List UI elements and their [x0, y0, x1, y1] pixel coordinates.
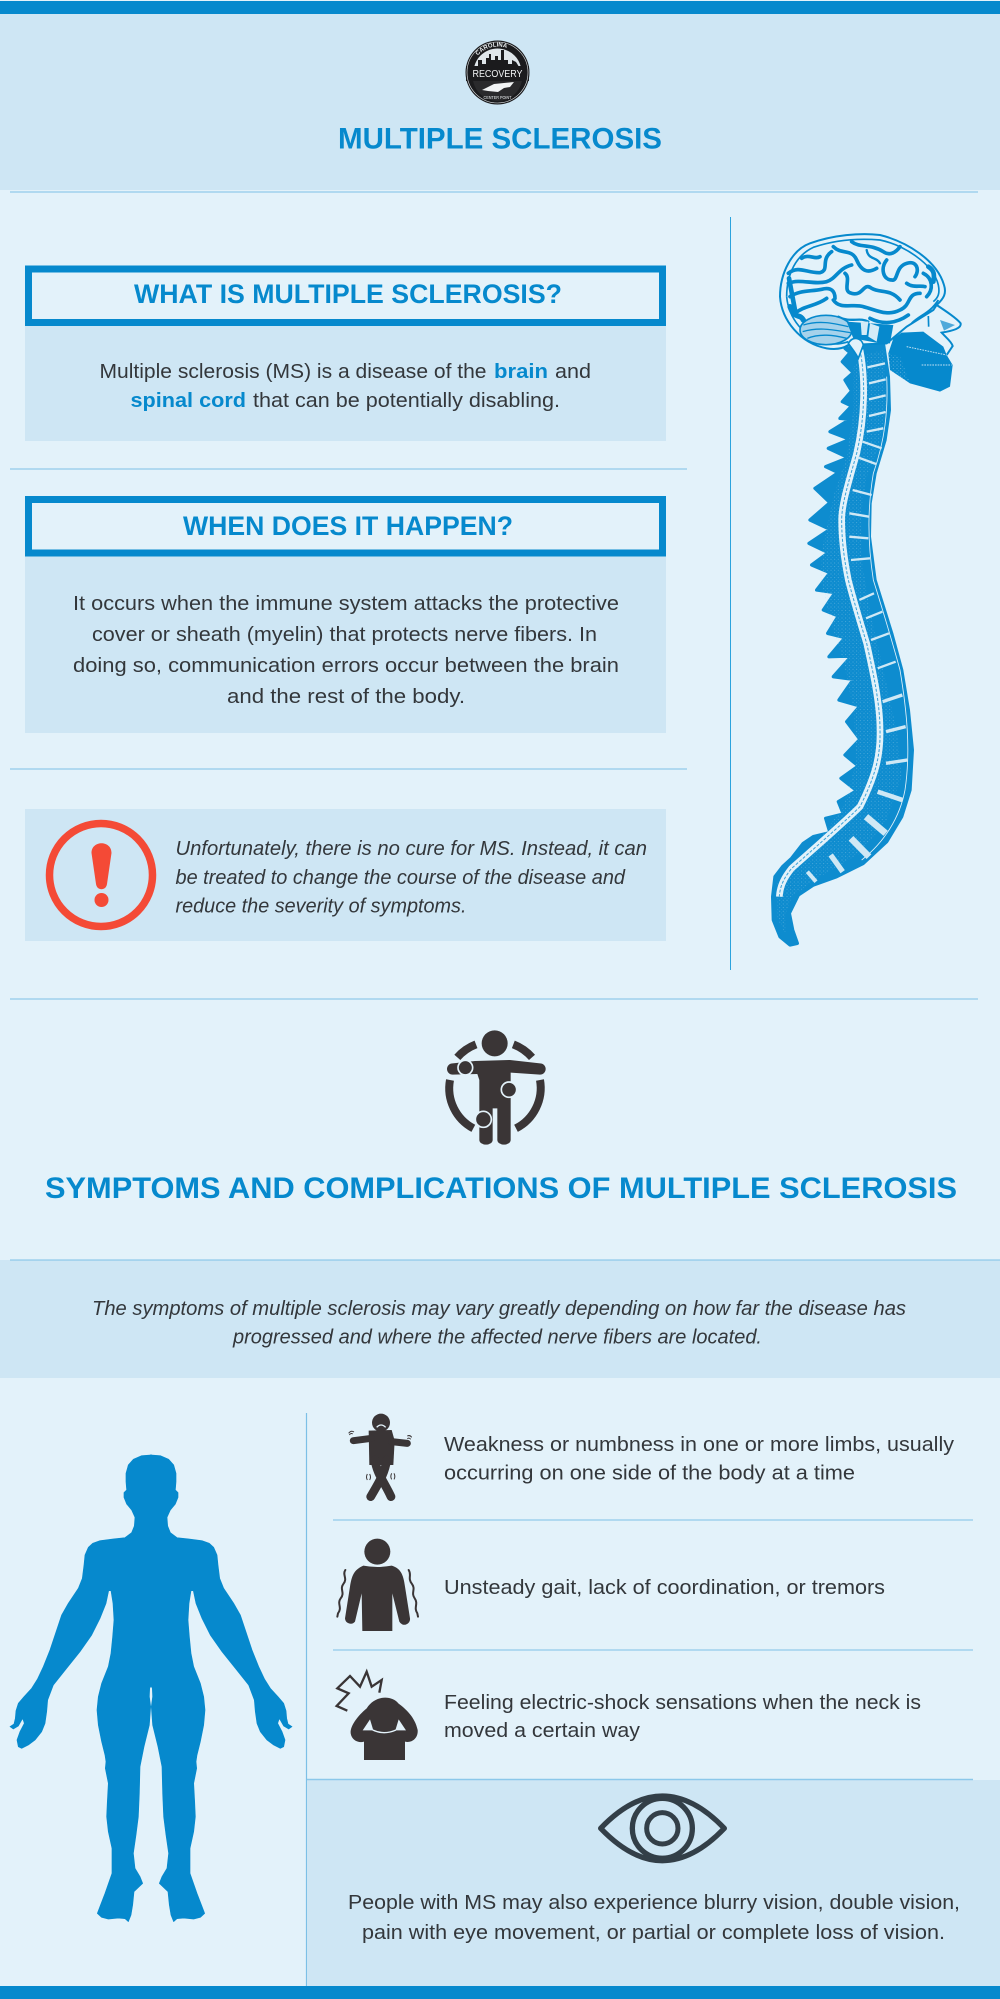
top accent bar [0, 1, 1000, 14]
symptom text: Feeling electric-shock sensations when the neck is [444, 1691, 921, 1714]
panel: header [0, 14, 1000, 190]
logo: Carolina Recovery [466, 40, 530, 104]
symptom row: electric shock [337, 1672, 921, 1760]
definition text: brain [494, 360, 548, 383]
nose and jaw [888, 305, 961, 392]
definition text: that can be potentially disabling. [253, 389, 560, 412]
explanation text: doing so, communication errors occur between the brain [73, 654, 619, 677]
icon: eye [601, 1796, 724, 1861]
intro text: The symptoms of multiple sclerosis may vary greatly depending on how far the disease has [92, 1297, 906, 1320]
intro text: progressed and where the affected nerve fibers are located. [232, 1326, 762, 1348]
explanation text [73, 592, 619, 708]
explanation text: and the rest of the body. [227, 685, 465, 708]
logo: Carolina Recovery: RECOVERY [472, 68, 522, 80]
definition text: spinal cord [130, 389, 246, 412]
brain folds [788, 242, 934, 322]
symptom text: Unsteady gait, lack of coordination, or tremors [444, 1576, 885, 1599]
skull outline [780, 234, 945, 349]
definition text: and [555, 360, 591, 383]
panel: when does it happen [25, 500, 666, 733]
intro text [92, 1297, 906, 1348]
explanation text: cover or sheath (myelin) that protects nerve fibers. In [92, 623, 597, 646]
vision text: People with MS may also experience blurry vision, double vision, [348, 1891, 960, 1914]
bottom accent bar [0, 1986, 1000, 1999]
cerebellum [800, 315, 852, 345]
definition text: Multiple sclerosis (MS) is a disease of the [100, 360, 486, 383]
illustration: human body silhouette [10, 1455, 292, 1922]
symptom text [444, 1433, 955, 1484]
vision text: pain with eye movement, or partial or complete loss of vision. [362, 1921, 945, 1944]
heading: symptoms and complications: SYMPTOMS AND COMPLICATIONS OF MULTIPLE SCLEROSIS [45, 1172, 957, 1205]
panel: vision [307, 1780, 1000, 1987]
illustration: brain and spine [773, 234, 961, 945]
callout text: be treated to change the course of the disease and [176, 866, 626, 889]
icon: weak limbs [349, 1414, 412, 1497]
spine column [773, 343, 912, 945]
callout text: reduce the severity of symptoms. [176, 894, 466, 918]
symptom text [444, 1691, 921, 1742]
panel: symptoms intro band [0, 1260, 1000, 1378]
heading box: WHEN DOES IT HAPPEN? [183, 511, 513, 541]
symptom text: moved a certain way [444, 1719, 641, 1742]
icon: warning [50, 824, 152, 926]
icon: body with joint markers [447, 1030, 546, 1145]
vision text [348, 1891, 960, 1944]
callout text: Unfortunately, there is no cure for MS. Instead, it can [176, 837, 647, 860]
heading box [28, 500, 662, 553]
icon: tremors [337, 1539, 418, 1631]
callout text [176, 837, 647, 918]
vertebral discs [807, 363, 907, 882]
heading box: WHAT IS MULTIPLE SCLEROSIS? [134, 279, 562, 309]
callout: no cure [25, 809, 666, 941]
definition text [100, 360, 591, 412]
icon: neck shock [337, 1672, 418, 1760]
brain stem [847, 300, 938, 358]
heading box [28, 269, 662, 322]
symptom row: weakness [349, 1414, 955, 1497]
symptom text: occurring on one side of the body at a time [444, 1462, 855, 1484]
panel: what is MS [25, 269, 666, 441]
symptom text: Weakness or numbness in one or more limbs, usually [444, 1433, 955, 1456]
logo: Carolina Recovery: CENTER POINT [484, 95, 512, 100]
logo: Carolina Recovery: CAROLINA [476, 42, 506, 55]
explanation text: It occurs when the immune system attacks the protective [73, 592, 619, 615]
symptom row: unsteady gait [337, 1539, 885, 1631]
title: MULTIPLE SCLEROSIS [338, 122, 662, 156]
